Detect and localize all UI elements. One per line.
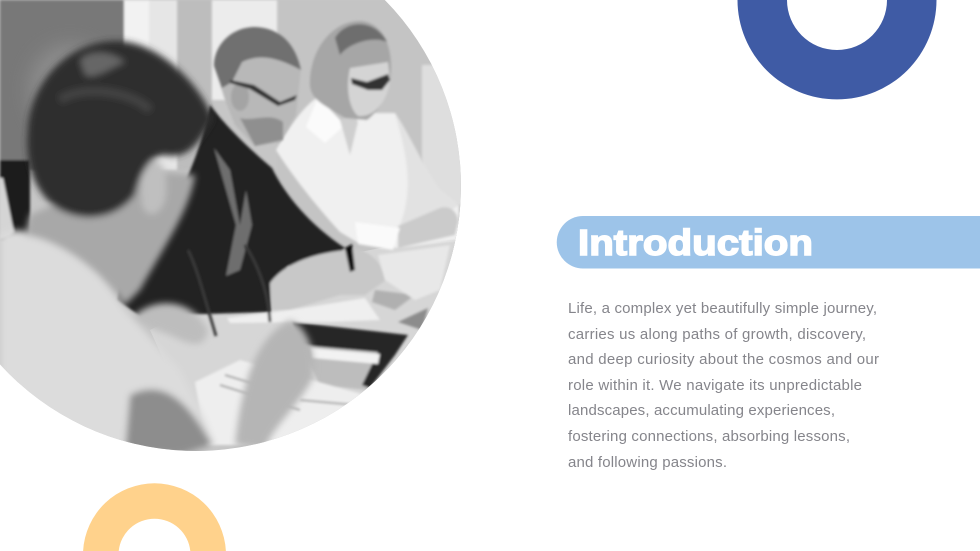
woman in white blouse	[276, 21, 459, 250]
hair	[310, 21, 391, 120]
icon: blue ring top right	[738, 0, 936, 99]
body paragraph: fostering connections, absorbing lessons,	[568, 428, 850, 445]
hands	[132, 303, 208, 344]
body paragraph: role within it. We navigate its unpredictable	[568, 377, 862, 394]
papers and tablet	[188, 245, 450, 445]
table	[150, 240, 455, 402]
chair	[0, 160, 30, 240]
body paragraph: carries us along paths of growth, discovery,	[568, 326, 866, 343]
sweater	[0, 230, 215, 455]
hair	[27, 41, 213, 217]
body paragraph: and deep curiosity about the cosmos and our	[568, 351, 879, 368]
foreground person	[0, 41, 313, 455]
head	[220, 56, 300, 140]
heading bar	[557, 216, 980, 268]
photo: team meeting in circle	[0, 0, 462, 455]
body paragraph: and following passions.	[568, 454, 727, 471]
body paragraph: Life, a complex yet beautifully simple journey,	[568, 300, 877, 317]
man in black shirt	[117, 27, 386, 316]
icon: yellow ring bottom left	[83, 483, 226, 551]
heading: Introduction: Introduction	[578, 222, 813, 263]
face	[348, 62, 390, 116]
body paragraph: landscapes, accumulating experiences,	[568, 402, 835, 419]
neck	[25, 170, 195, 305]
body paragraph	[568, 300, 879, 471]
